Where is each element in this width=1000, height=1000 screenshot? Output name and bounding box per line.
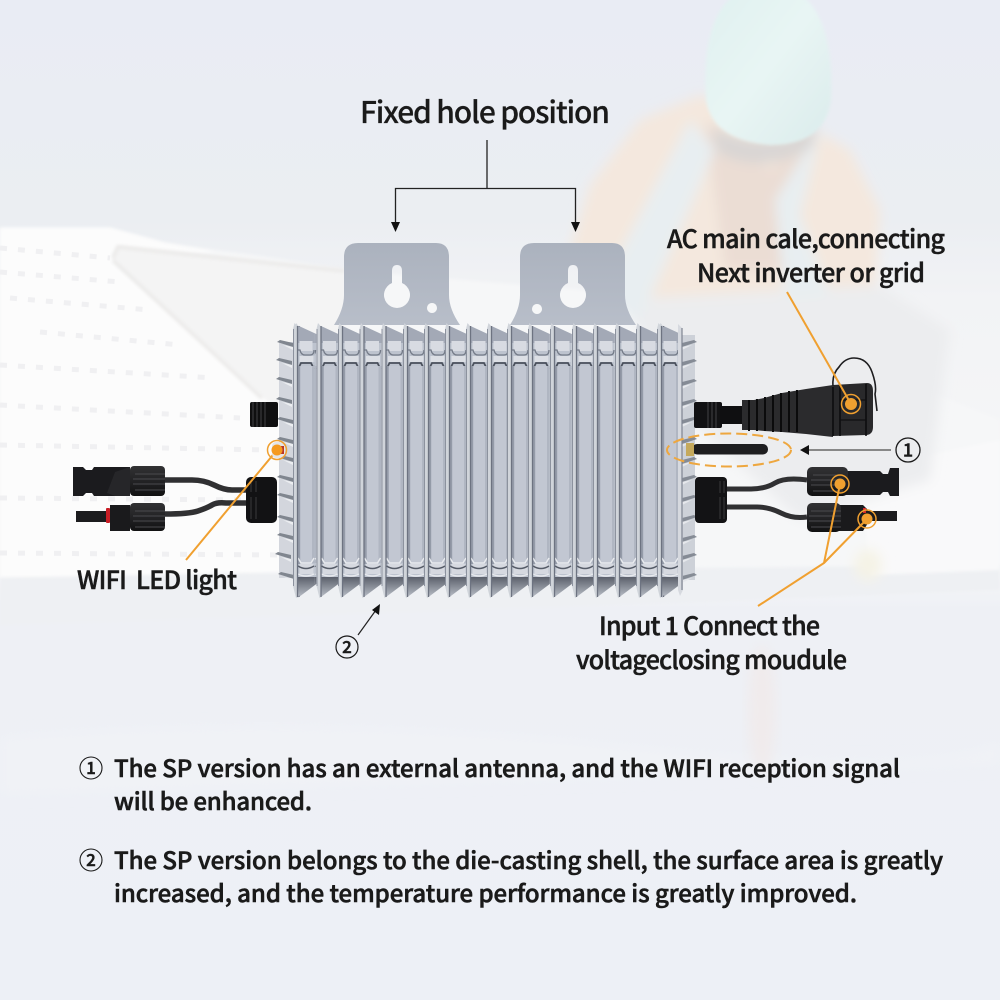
label: AC main cable bbox=[667, 220, 946, 290]
mounting tab: right bbox=[510, 243, 636, 325]
dashed ellipse around antenna bbox=[667, 434, 791, 466]
antenna bbox=[686, 443, 768, 456]
note 2 text bbox=[114, 841, 943, 909]
right main AC cable and connector bbox=[694, 358, 877, 437]
note 1 number: 1 bbox=[86, 754, 96, 779]
label: AC main cable: AC main cale,connecting bbox=[667, 220, 946, 256]
arrow: marker 2 to shell bbox=[358, 604, 380, 635]
note 1 number bbox=[80, 754, 102, 779]
marker: input upper bbox=[831, 475, 849, 493]
marker: input lower bbox=[858, 510, 876, 528]
label: WIFI LED light: WIFI LED light bbox=[77, 561, 237, 597]
arrow: marker 1 to antenna bbox=[800, 445, 891, 455]
title: fixed hole position: Fixed hole position bbox=[360, 88, 610, 132]
note 2 text: increased, and the temperature performance is greatly improved. bbox=[114, 874, 857, 909]
label: input 1: voltageclosing moudule bbox=[576, 641, 847, 677]
bracket arrows to mounting holes bbox=[391, 140, 580, 232]
label: input 1 bbox=[576, 607, 847, 677]
background: worker bbox=[570, 95, 950, 581]
heat sink fins bbox=[293, 323, 683, 598]
note 1 bbox=[80, 749, 900, 817]
left MC4 connector: lower bbox=[76, 503, 165, 531]
callout lines and markers bbox=[186, 292, 876, 606]
left side teeth bbox=[275, 340, 294, 582]
label: AC main cable: Next inverter or grid bbox=[697, 254, 925, 290]
note 2 text: The SP version belongs to the die-casting shell, the surface area is greatly bbox=[114, 841, 943, 876]
left AC stub connector bbox=[250, 402, 278, 427]
right cables bbox=[727, 479, 807, 518]
mounting tab: left bbox=[334, 243, 460, 325]
marker: WIFI LED bbox=[268, 440, 286, 460]
left cables bbox=[165, 480, 246, 514]
inverter bbox=[73, 243, 899, 598]
background: roof and solar panel bbox=[0, 228, 1000, 795]
left MC4 connector: upper bbox=[73, 466, 165, 496]
marker 2 on diagram: 2 bbox=[342, 633, 352, 658]
marker: AC connector bbox=[842, 394, 860, 414]
right PV junction box bbox=[695, 477, 727, 523]
label: input 1: Input 1 Connect the bbox=[599, 607, 820, 643]
marker 2 on diagram bbox=[336, 633, 358, 658]
note 2 bbox=[80, 841, 943, 909]
right MC4 connector: lower bbox=[807, 503, 897, 532]
left PV junction box bbox=[246, 477, 277, 523]
background: helmet bbox=[706, 0, 831, 145]
right side teeth bbox=[682, 335, 697, 583]
note 2 number bbox=[80, 846, 102, 871]
note 1 text: The SP version has an external antenna, and the WIFI reception signal bbox=[114, 749, 900, 784]
note 2 number: 2 bbox=[86, 846, 96, 871]
marker 1 on diagram: 1 bbox=[903, 436, 913, 462]
marker 1 on diagram bbox=[896, 436, 920, 462]
right MC4 connector: upper bbox=[807, 467, 899, 496]
note 1 text bbox=[114, 749, 900, 817]
note 1 text: will be enhanced. bbox=[114, 782, 312, 817]
